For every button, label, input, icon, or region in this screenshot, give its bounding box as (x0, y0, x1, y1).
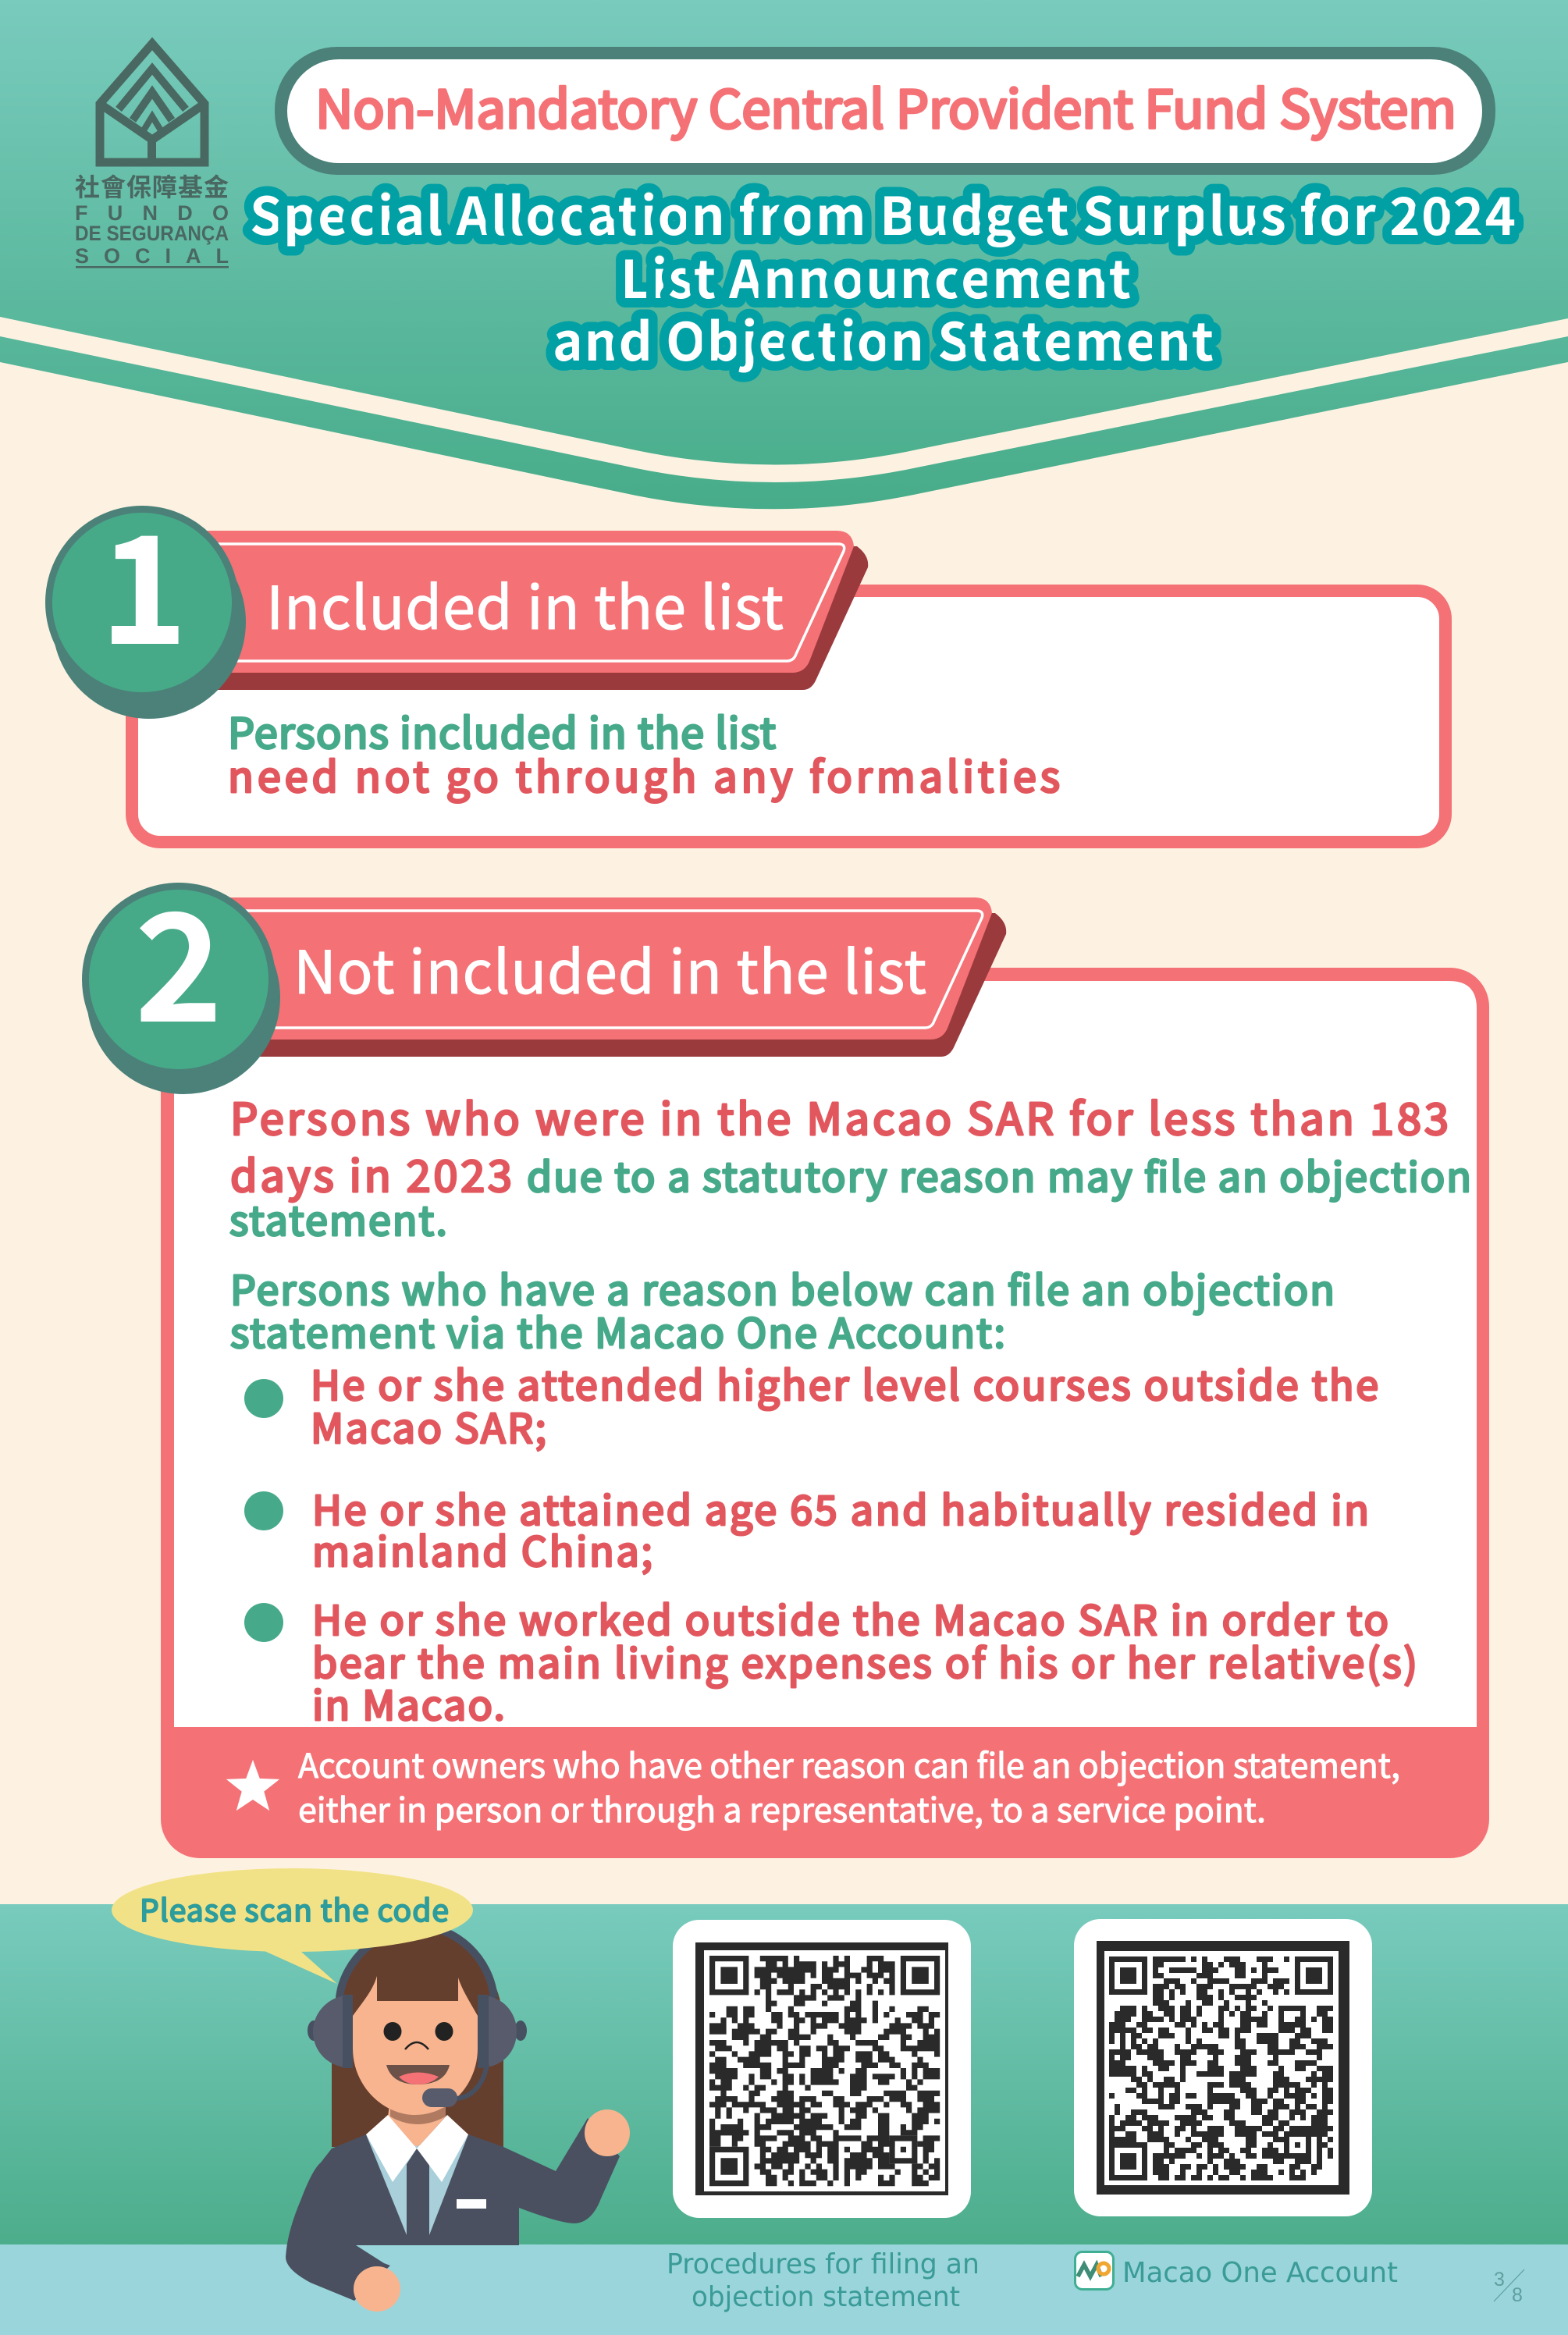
bullet 2: He or she attained age 65 and habitually resided in (312, 1478, 1369, 1537)
title pill: Non-Mandatory Central Provident Fund System (315, 68, 1456, 144)
footnote with star: Account owners who have other reason can file an objection statement, (298, 1740, 1400, 1788)
neck (388, 2099, 446, 2148)
hair (332, 1928, 503, 2147)
shirt (366, 2134, 468, 2240)
bullet 1: He or she attended higher level courses outside the (311, 1353, 1378, 1412)
reasons intro (230, 1258, 1335, 1359)
bullet 3: bear the main living expenses of his or her relative(s) (312, 1631, 1417, 1690)
panel: included in the list (45, 471, 1445, 842)
intro text: statement. (229, 1189, 447, 1247)
ribbon 2: Not included in the list (293, 925, 926, 1011)
logo: Fundo de Segurança Social: SOCIAL (75, 244, 229, 268)
name tag (457, 2199, 486, 2209)
panel 2 box (161, 968, 1489, 1858)
QR caption: procedures: Procedures for filing an (667, 2248, 980, 2280)
footer bands (0, 1904, 1568, 2335)
face (353, 1976, 478, 2115)
logo: Fundo de Segurança Social: FUNDO (75, 201, 229, 225)
QR code: procedures for filing an objection statement (709, 1956, 940, 2186)
eyes, nose and mouth (384, 2022, 453, 2084)
bullet 1 (244, 1353, 1378, 1455)
subtitle: Special Allocation from Budget Surplus for 2024 (250, 175, 1516, 251)
reasons intro: Persons who have a reason below can file an objection (230, 1258, 1335, 1317)
subtitle (250, 175, 1516, 376)
QR card 2 (1074, 1919, 1372, 2216)
ribbon 2 (222, 897, 1006, 1057)
headband (340, 1926, 494, 1998)
logo: Fundo de Segurança Social: 社會保障基金 (75, 168, 229, 204)
bullet 2: mainland China; (312, 1519, 652, 1578)
page number: 3 (1494, 2269, 1505, 2291)
logo: Fundo de Segurança Social (75, 44, 229, 268)
QR caption: procedures: objection statement (692, 2281, 960, 2313)
intro text: due to a statutory reason may file an objection (527, 1145, 1471, 1203)
collar (366, 2115, 468, 2182)
header wave background (0, 0, 1568, 509)
reasons intro: statement via the Macao One Account: (230, 1301, 1005, 1359)
bullet 1: Macao SAR; (311, 1396, 546, 1455)
footnote with star: either in person or through a representative, to a service point. (298, 1784, 1266, 1832)
panel 1 box (132, 591, 1445, 842)
ribbon 1 (195, 531, 868, 690)
number badge 2 (82, 848, 280, 1094)
panel 1 text (228, 699, 1060, 805)
number badge 2: 2 (134, 848, 223, 1065)
panel 1 text: Persons included in the list (228, 699, 776, 761)
bullet 3: He or she worked outside the Macao SAR in order to (312, 1588, 1388, 1647)
intro text: Persons who were in the Macao SAR for less than 183 (230, 1085, 1449, 1148)
QR card 1 (673, 1920, 971, 2218)
subtitle: and Objection Statement (553, 300, 1214, 376)
speech bubble (112, 1868, 473, 1984)
subtitle: List Announcement (620, 238, 1131, 314)
icon: Macao One Account app (1076, 2252, 1113, 2290)
bullet 2 (244, 1478, 1369, 1578)
hands (585, 2109, 630, 2156)
jacket and arms (286, 2118, 620, 2301)
logo: Fundo de Segurança Social: DE SEGURANÇA (75, 222, 229, 245)
agent illustration (286, 1926, 630, 2312)
bullet 3 (244, 1588, 1417, 1732)
panel 1 text: need not go through any formalities (228, 743, 1060, 805)
ribbon 1: Included in the list (266, 560, 784, 646)
headphones (308, 1995, 527, 2107)
footnote with star (226, 1740, 1400, 1832)
QR code: Macao One Account (1109, 1956, 1333, 2180)
number badge 1: 1 (99, 471, 188, 688)
title pill (275, 47, 1495, 175)
bullet 3: in Macao. (312, 1673, 505, 1732)
speech bubble: Please scan the code (140, 1887, 449, 1931)
QR caption: Macao One Account: Macao One Account (1122, 2257, 1398, 2289)
QR caption: procedures (667, 2248, 980, 2313)
panel: not included in the list (82, 848, 1489, 1858)
intro text: days in 2023 (230, 1142, 512, 1205)
page number: 8 (1512, 2284, 1523, 2306)
page number (1494, 2269, 1524, 2306)
intro text (229, 1085, 1471, 1247)
tie (407, 2148, 429, 2235)
number badge 1 (45, 471, 246, 719)
